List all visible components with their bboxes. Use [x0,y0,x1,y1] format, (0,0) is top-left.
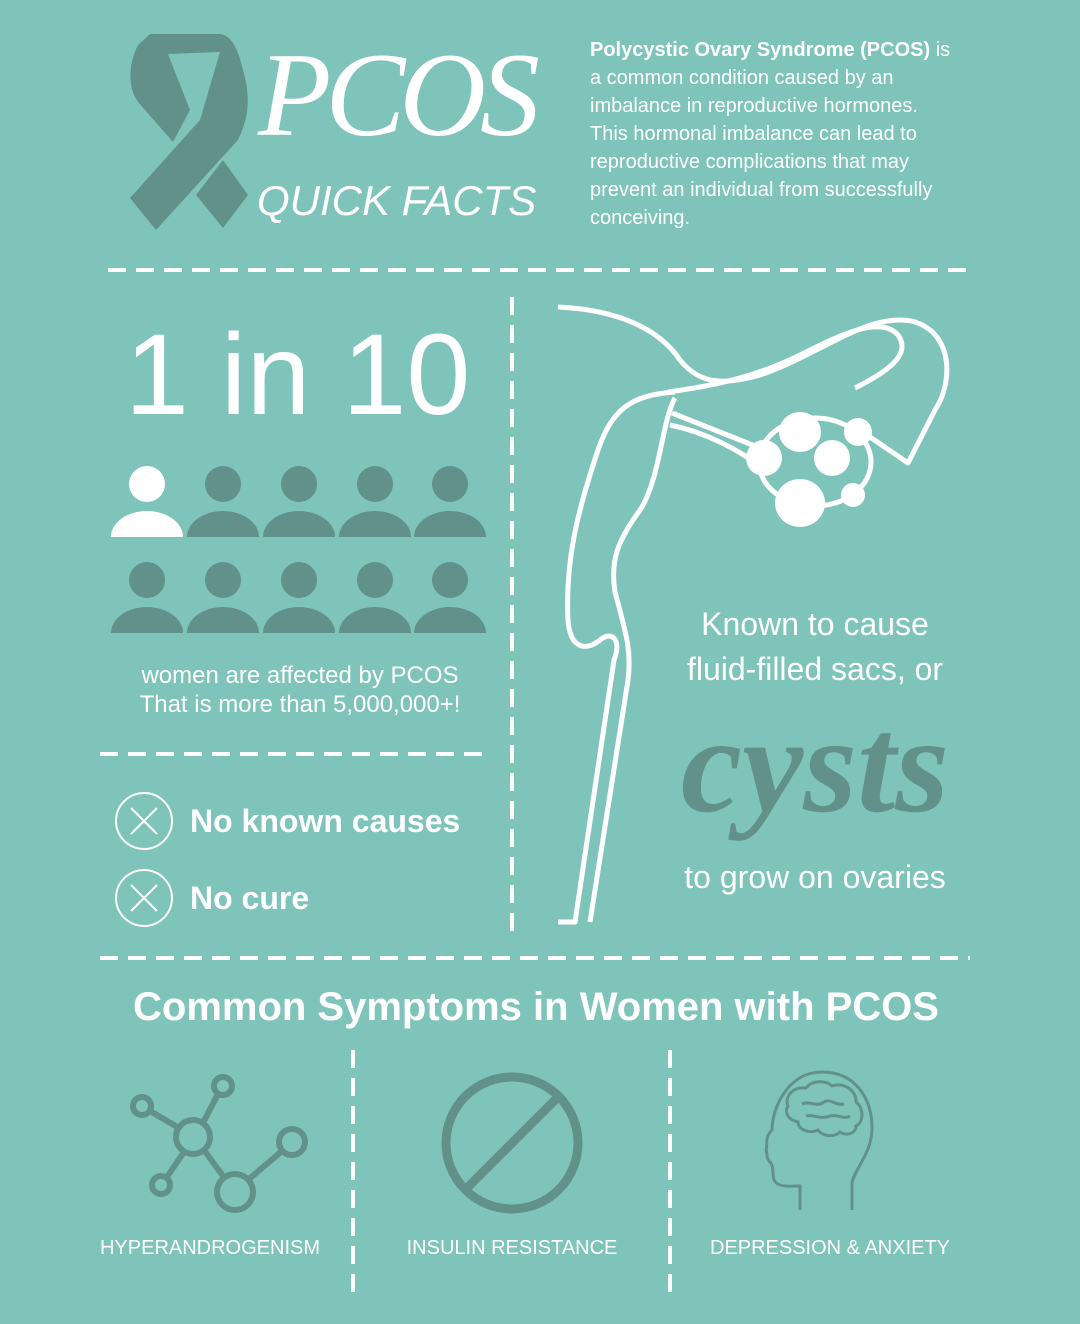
intro text: prevent an individual from successfully [590,179,932,201]
stat caption: That is more than 5,000,000+! [140,691,460,718]
text: cysts [681,688,949,841]
intro text: a common condition caused by an [590,67,894,89]
cysts text block [687,606,943,687]
fact: no known causes: No known causes [190,803,460,839]
fact: no cure [115,869,309,927]
label: depression & anxiety: DEPRESSION & ANXIETY [710,1237,950,1259]
cysts text block: Known to cause [701,606,929,642]
icon: awareness ribbon [130,34,248,230]
intro text: conceiving. [590,207,690,229]
subtitle: quick facts: QUICK FACTS [257,177,536,224]
text: to grow on ovaries [684,859,946,895]
title: PCOS: PCOS [258,28,534,161]
fact: no known causes [115,792,460,850]
icon: head with brain [764,1070,874,1210]
intro text: reproductive complications that may [590,151,909,173]
heading: common symptoms: Common Symptoms in Women with PCOS [133,985,939,1029]
fact: no cure: No cure [190,880,309,916]
label: insulin resistance: INSULIN RESISTANCE [407,1237,617,1259]
icon: prohibited sign [442,1072,582,1214]
people icon grid [111,466,486,633]
intro text: This hormonal imbalance can lead to [590,123,917,145]
intro text: Polycystic Ovary Syndrome (PCOS) is [590,39,950,61]
icon: molecule [130,1074,308,1213]
intro text: imbalance in reproductive hormones. [590,95,918,117]
intro text [590,39,950,229]
label: hyperandrogenism: HYPERANDROGENISM [100,1237,320,1259]
stat: 1 in 10: 1 in 10 [125,311,470,439]
cysts text block: fluid-filled sacs, or [687,651,943,687]
stat caption [140,662,460,718]
stat caption: women are affected by PCOS [141,662,459,689]
